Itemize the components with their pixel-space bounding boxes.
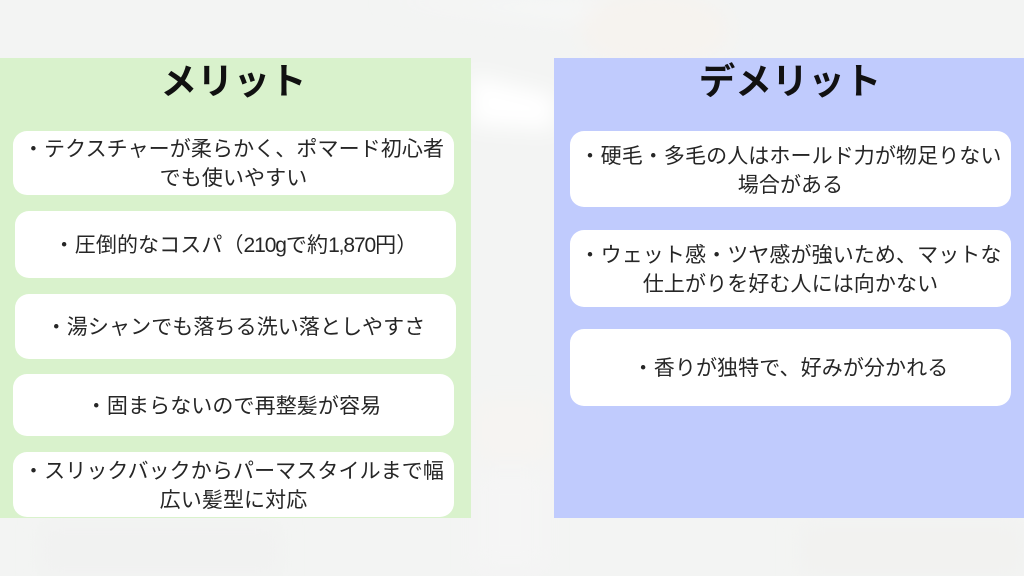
- merit card 5: ・スリックバックからパーマスタイルまで幅: [23, 460, 444, 482]
- demerit card 2: [570, 230, 1011, 307]
- demerit card 3: ・香りが独特で、好みが分かれる: [633, 357, 948, 380]
- panel: demerits: [554, 58, 1024, 518]
- demerit card 2: 仕上がりを好む人には向かない: [643, 272, 938, 296]
- merit card 2: ・圧倒的なコスパ（210gで約1,870円）: [54, 234, 417, 257]
- demerit card 1: ・硬毛・多毛の人はホールド力が物足りない: [580, 145, 1002, 168]
- merit card 1: でも使いやすい: [160, 167, 307, 190]
- heading: demerits: デメリット: [699, 61, 881, 102]
- demerit card 2: ・ウェット感・ツヤ感が強いため、マットな: [580, 244, 1002, 266]
- merit card 5: [13, 452, 454, 517]
- demerit card 3: [570, 329, 1011, 406]
- merit card 1: ・テクスチャーが柔らかく、ポマード初心者: [23, 138, 444, 161]
- merit card 3: [15, 294, 456, 359]
- merit card 1: [13, 131, 454, 195]
- heading: merits: メリット: [160, 61, 306, 102]
- merit card 2: [15, 211, 456, 278]
- merit card 5: 広い髪型に対応: [160, 488, 307, 512]
- demerit card 1: [570, 131, 1011, 207]
- panel: merits: [0, 58, 471, 518]
- demerit card 1: 場合がある: [738, 174, 843, 197]
- merit card 4: ・固まらないので再整髪が容易: [86, 394, 381, 418]
- merit card 4: [13, 374, 454, 436]
- merit card 3: ・湯シャンでも落ちる洗い落としやすさ: [46, 316, 425, 339]
